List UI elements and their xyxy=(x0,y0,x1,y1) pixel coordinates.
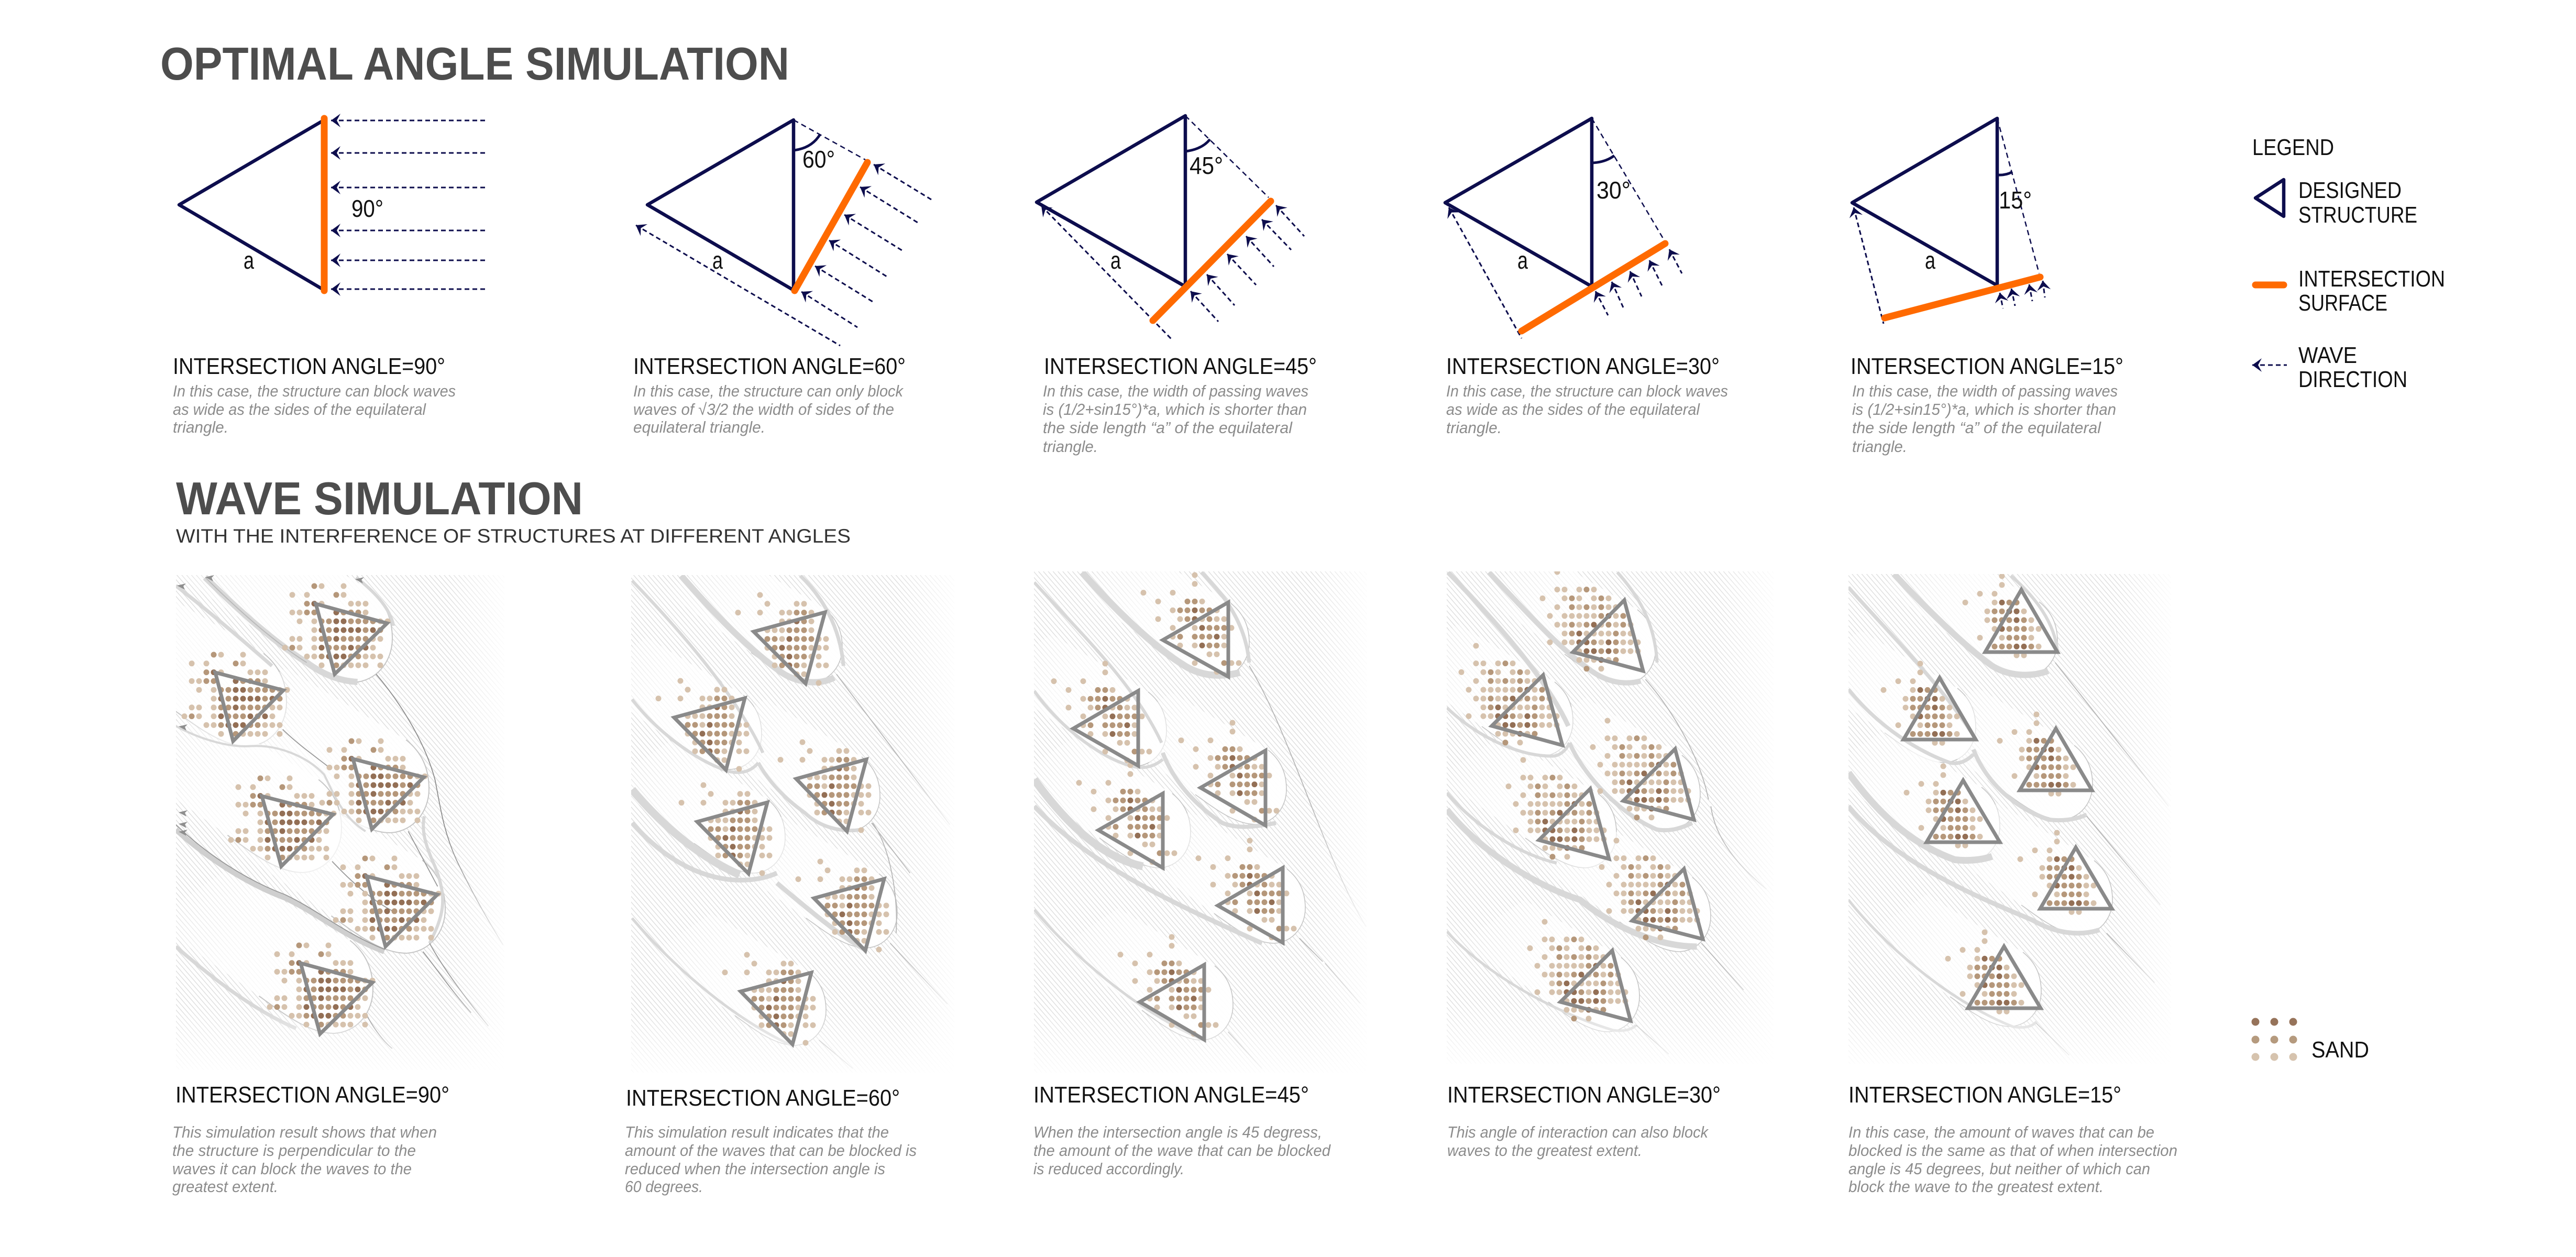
streamline field xyxy=(176,575,504,1070)
edge fade xyxy=(1848,574,2171,1064)
title: optimal angle simulation: OPTIMAL ANGLE SIMULATION xyxy=(160,38,789,90)
panel: wave simulation 45 xyxy=(1034,571,1366,1068)
side label: a xyxy=(1925,247,1935,274)
wakes behind structures xyxy=(989,546,1305,1040)
description: wave 90: greatest extent. xyxy=(172,1177,278,1196)
legend: sand xyxy=(2251,1018,2369,1063)
description: wave 90: waves it can block the waves to the xyxy=(172,1160,412,1178)
wave direction arrows xyxy=(1449,118,1682,338)
intersection surface xyxy=(1153,201,1271,321)
angle label: 60° xyxy=(802,146,835,173)
heading: wave 45: INTERSECTION ANGLE=45° xyxy=(1033,1082,1309,1108)
heading: intersection angle 30: INTERSECTION ANGLE=30° xyxy=(1446,354,1720,379)
description: wave 30: waves to the greatest extent. xyxy=(1447,1141,1642,1160)
wakes behind structures xyxy=(1798,544,2112,1027)
wave direction arrows xyxy=(331,120,486,289)
sand dots xyxy=(1054,575,1294,1034)
edge fade xyxy=(1447,571,1774,1064)
description: wave 60: reduced when the intersection angle is xyxy=(625,1160,885,1178)
panel: angle diagram 15 xyxy=(1852,118,2045,324)
streamline bands xyxy=(1848,574,2168,1055)
structures xyxy=(1903,590,2112,1008)
panel: angle diagram 60 xyxy=(636,120,931,346)
wakes behind structures xyxy=(176,575,446,1034)
flow arrowheads xyxy=(177,575,364,836)
triangle structure xyxy=(647,120,794,290)
sand dots xyxy=(1461,572,1697,1019)
description: wave 90 xyxy=(172,1123,437,1196)
legend item: intersection surface xyxy=(2255,266,2445,316)
legend item: designed structure xyxy=(2255,178,2417,228)
intersection surface xyxy=(1522,244,1665,331)
heading: wave simulation: WAVE SIMULATION xyxy=(176,472,583,524)
streamline field xyxy=(631,575,954,1073)
description: wave 30: This angle of interaction can also block xyxy=(1447,1123,1709,1141)
streamline field xyxy=(1848,574,2171,1064)
panel: wave simulation 60 xyxy=(631,575,950,1068)
description: wave 15 xyxy=(1848,1123,2177,1196)
streamline bands xyxy=(632,576,950,1068)
description 15: In this case, the width of passing waves xyxy=(1852,382,2118,400)
angle label: 90° xyxy=(351,195,383,222)
description 30: as wide as the sides of the equilateral xyxy=(1446,400,1700,418)
side label: a xyxy=(1517,247,1528,274)
heading: wave 90: INTERSECTION ANGLE=90° xyxy=(175,1082,449,1108)
description 45: In this case, the width of passing waves xyxy=(1043,382,1308,400)
triangle structure xyxy=(1852,118,1997,285)
description: wave 60: This simulation result indicates that the xyxy=(625,1123,889,1141)
legend item: designed structure: STRUCTURE xyxy=(2298,202,2417,228)
heading: intersection angle 90: INTERSECTION ANGLE=90° xyxy=(173,354,445,379)
heading: wave 30: INTERSECTION ANGLE=30° xyxy=(1447,1082,1721,1108)
side label: a xyxy=(244,247,254,274)
sand dot swatches xyxy=(2251,1018,2297,1061)
streamline field xyxy=(1034,571,1367,1073)
edge fade xyxy=(631,575,954,1073)
triangle structure xyxy=(1037,116,1185,286)
description: wave 60: 60 degrees. xyxy=(625,1177,703,1196)
intersection surface xyxy=(321,118,328,291)
heading: intersection angle 60: INTERSECTION ANGLE=60° xyxy=(633,354,906,379)
wakes behind structures xyxy=(631,575,898,1046)
description: wave 45: the amount of the wave that can be blocked xyxy=(1033,1141,1331,1160)
legend item: wave direction: DIRECTION xyxy=(2298,367,2407,392)
streamline bands xyxy=(1034,572,1366,1068)
streamline bands xyxy=(1447,572,1766,1054)
angle label: 30° xyxy=(1597,177,1631,204)
description 90: triangle. xyxy=(173,418,228,436)
side label: a xyxy=(1110,247,1121,274)
subtitle: WITH THE INTERFERENCE OF STRUCTURES AT DIFFERENT ANGLES xyxy=(176,525,851,547)
description 60: waves of √3/2 the width of sides of the xyxy=(633,400,894,418)
description 30: triangle. xyxy=(1446,418,1502,437)
description 30: In this case, the structure can block waves xyxy=(1446,382,1728,400)
heading: intersection angle 15: INTERSECTION ANGLE=15° xyxy=(1851,354,2123,379)
legend xyxy=(2252,135,2445,392)
description 15: triangle. xyxy=(1852,437,1907,456)
edge fade xyxy=(1034,571,1367,1073)
panel: angle diagram 30 xyxy=(1445,118,1682,338)
triangle structure xyxy=(179,120,324,290)
description 90 xyxy=(173,382,456,436)
intersection surface xyxy=(1885,277,2040,318)
description: wave 15: angle is 45 degrees, but neither of which can xyxy=(1848,1160,2150,1178)
description: wave 45: When the intersection angle is 45 degress, xyxy=(1033,1123,1322,1141)
description 15: is (1/2+sin15°)*a, which is shorter than xyxy=(1852,400,2116,418)
legend item: intersection surface: INTERSECTION xyxy=(2298,266,2445,292)
panel: angle diagram 90 xyxy=(179,118,486,291)
heading: wave 15: INTERSECTION ANGLE=15° xyxy=(1848,1082,2121,1108)
angle arc xyxy=(1592,156,1614,163)
panel: wave simulation 15 xyxy=(1798,544,2171,1064)
streamline bands xyxy=(176,577,503,1049)
legend item: wave direction: WAVE xyxy=(2298,343,2357,368)
wave direction arrows xyxy=(1854,118,2045,324)
angle arc xyxy=(794,134,820,150)
heading: wave 60: INTERSECTION ANGLE=60° xyxy=(626,1085,900,1111)
structures xyxy=(215,604,437,1034)
heading: intersection angle 45: INTERSECTION ANGLE=45° xyxy=(1044,354,1317,379)
description: wave 90: the structure is perpendicular to the xyxy=(172,1141,416,1160)
streamline field xyxy=(1447,571,1774,1064)
description 45: triangle. xyxy=(1043,437,1098,456)
structures xyxy=(1492,600,1703,1021)
description 45 xyxy=(1043,382,1308,456)
intersection surface xyxy=(795,162,867,291)
angle arc xyxy=(1185,139,1210,151)
description 45: the side length “a” of the equilateral xyxy=(1043,418,1293,437)
legend item: designed structure: DESIGNED xyxy=(2298,178,2402,203)
wave direction arrows xyxy=(636,120,931,346)
structures xyxy=(1073,602,1283,1040)
angle arc xyxy=(1997,172,2012,175)
description: wave 15: In this case, the amount of waves that can be xyxy=(1848,1123,2154,1141)
description 60: equilateral triangle. xyxy=(633,418,765,436)
sand dots xyxy=(658,595,886,1043)
description 60 xyxy=(633,382,904,436)
legend item: intersection surface: SURFACE xyxy=(2298,290,2387,316)
description 90: as wide as the sides of the equilateral xyxy=(173,400,426,418)
angle label: 15° xyxy=(1999,186,2032,214)
triangle structure xyxy=(1445,118,1592,286)
description: wave 15: block the wave to the greatest extent. xyxy=(1848,1177,2104,1196)
description: wave 15: blocked is the same as that of when intersection xyxy=(1848,1141,2177,1160)
description 45: is (1/2+sin15°)*a, which is shorter than xyxy=(1043,400,1307,418)
legend heading: LEGEND xyxy=(2252,135,2334,160)
angle label: 45° xyxy=(1190,152,1223,179)
panel: wave simulation 30 xyxy=(1395,552,1774,1064)
description: wave 45: is reduced accordingly. xyxy=(1033,1160,1184,1178)
description: wave 60 xyxy=(625,1123,917,1196)
edge fade xyxy=(176,575,504,1070)
panel: angle diagram 45 xyxy=(1037,116,1304,339)
description: wave 30 xyxy=(1447,1123,1709,1160)
sand label: SAND xyxy=(2311,1037,2369,1063)
description: wave 45 xyxy=(1033,1123,1331,1178)
description 15 xyxy=(1852,382,2118,456)
sand dots xyxy=(1884,576,2094,1011)
structures xyxy=(674,612,884,1044)
sand dots xyxy=(184,586,438,1024)
description 30 xyxy=(1446,382,1728,437)
description: wave 60: amount of the waves that can be blocked is xyxy=(625,1141,917,1160)
description 60: In this case, the structure can only block xyxy=(633,382,904,400)
side label: a xyxy=(712,247,723,274)
wakes behind structures xyxy=(1395,552,1711,1032)
description 90: In this case, the structure can block waves xyxy=(173,382,456,400)
panel: wave simulation 90 xyxy=(176,575,503,1062)
wave direction arrows xyxy=(1041,116,1304,339)
legend item: wave direction xyxy=(2252,343,2407,392)
description: wave 90: This simulation result shows that when xyxy=(172,1123,437,1141)
description 15: the side length “a” of the equilateral xyxy=(1852,418,2101,437)
